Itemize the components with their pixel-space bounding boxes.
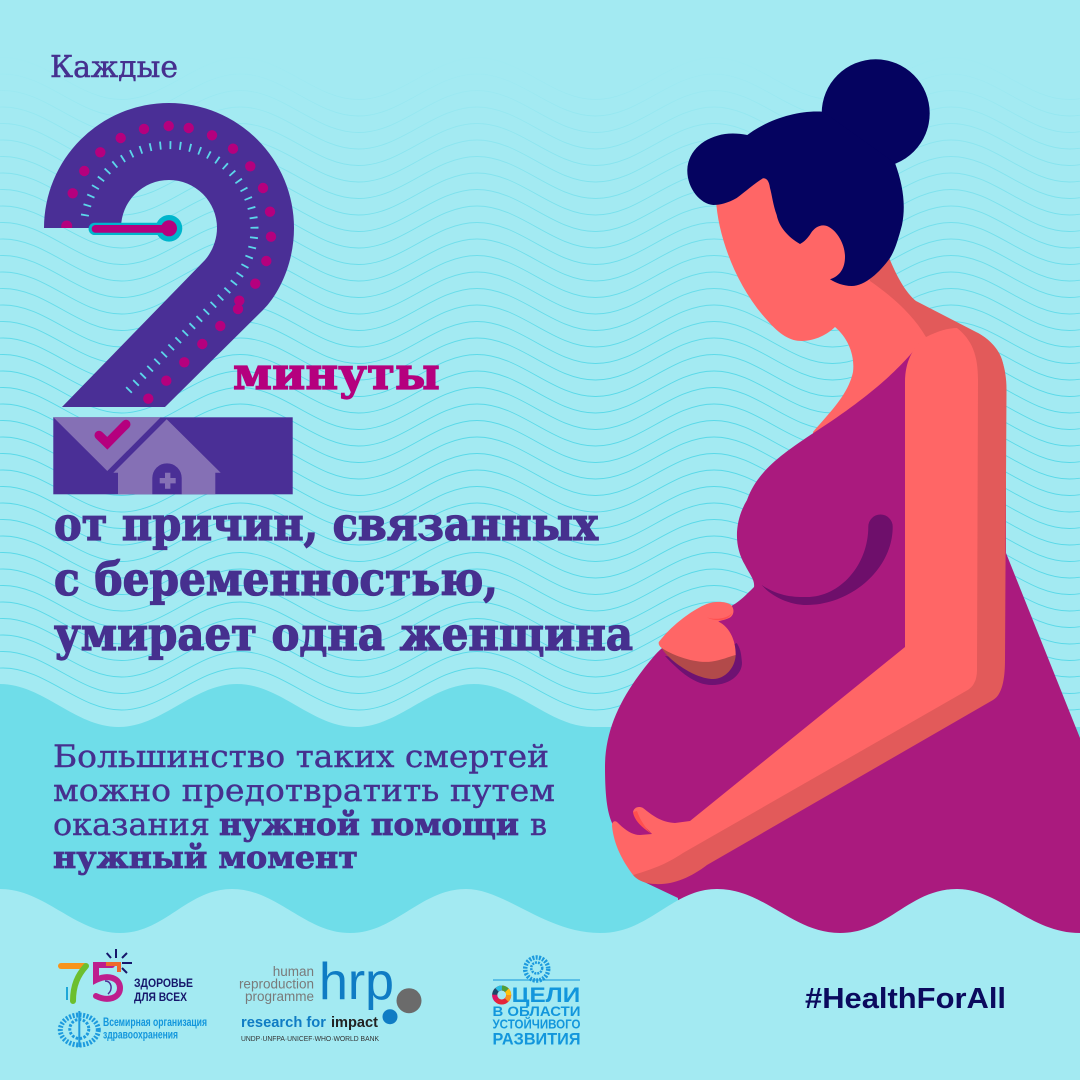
SDG colour wheel xyxy=(495,988,509,1002)
dress xyxy=(605,343,1080,960)
supporting text: Большинство таких смертей xyxy=(53,739,549,775)
hashtag: #HealthForAll xyxy=(805,983,1006,1015)
teal wave band xyxy=(0,684,1080,960)
thumb accent xyxy=(707,613,732,620)
upper hand xyxy=(659,602,736,662)
label: Здоровье для всех xyxy=(134,976,193,1004)
hair xyxy=(687,111,904,286)
logo: WHO 75 years xyxy=(60,949,207,1047)
logo: HRP: UNDP·UNFPA·UNICEF·WHO·WORLD BANK xyxy=(241,1034,379,1043)
logo: Sustainable Development Goals: УСТОЙЧИВОГО xyxy=(492,1016,581,1032)
upper hand palm shade xyxy=(662,648,736,679)
supporting text: можно предотвратить путем xyxy=(53,773,555,809)
main heading: с беременностью, xyxy=(54,552,498,606)
head and neck xyxy=(716,170,930,445)
supporting text: нужной помощи xyxy=(219,807,519,843)
logo: Sustainable Development Goals xyxy=(492,958,581,1048)
finger accent xyxy=(633,811,652,834)
bust shadow xyxy=(762,514,893,605)
bottom light wave xyxy=(0,889,1080,1080)
kicker: Каждые: Каждые xyxy=(50,50,178,85)
gauge needle xyxy=(89,215,182,242)
WHO emblem xyxy=(60,1011,98,1047)
logo: Sustainable Development Goals: В ОБЛАСТИ xyxy=(492,1003,580,1019)
UN emblem xyxy=(525,958,548,980)
logo: Sustainable Development Goals: ЦЕЛИ xyxy=(512,984,580,1007)
label: Всемирная организация здравоохранения xyxy=(103,1015,207,1042)
logo: HRP xyxy=(239,953,422,1043)
logo: HRP: hrp xyxy=(319,953,394,1011)
label: Здоровье для всех: ЗДОРОВЬЕ xyxy=(134,976,193,990)
label: Всемирная организация здравоохранения: здравоохранения xyxy=(103,1028,178,1042)
arm and lower hand xyxy=(612,328,978,875)
big numeral 2 styled as a gauge xyxy=(44,103,294,407)
neck and back shadow xyxy=(850,255,1004,420)
main heading xyxy=(54,497,633,661)
label: Здоровье для всех: ДЛЯ ВСЕХ xyxy=(134,990,187,1004)
illustration: pregnant woman xyxy=(605,59,1080,960)
logo: HRP: impact xyxy=(331,1015,378,1031)
clinic banner with house and check mark xyxy=(53,417,293,494)
numeral 75 xyxy=(61,964,120,1001)
logo: HRP: programme xyxy=(245,989,314,1004)
main heading: от причин, связанных xyxy=(54,497,599,551)
logo: HRP: human xyxy=(273,964,314,979)
supporting text: в xyxy=(530,807,547,843)
logo: HRP: research for xyxy=(241,1015,326,1031)
logo: Sustainable Development Goals: РАЗВИТИЯ xyxy=(492,1030,580,1048)
hair bun xyxy=(822,59,930,167)
logo: HRP: reproduction xyxy=(239,976,314,992)
arm shadow xyxy=(633,328,1006,884)
label: минуты: минуты xyxy=(233,349,440,400)
sun rays xyxy=(107,949,132,973)
label: Всемирная организация здравоохранения: Всемирная организация xyxy=(103,1015,207,1029)
supporting text xyxy=(53,739,555,876)
supporting text: оказания xyxy=(53,807,210,843)
main heading: умирает одна женщина xyxy=(54,607,633,661)
upper hand shadow xyxy=(665,643,742,685)
supporting text: нужный момент xyxy=(53,840,358,876)
